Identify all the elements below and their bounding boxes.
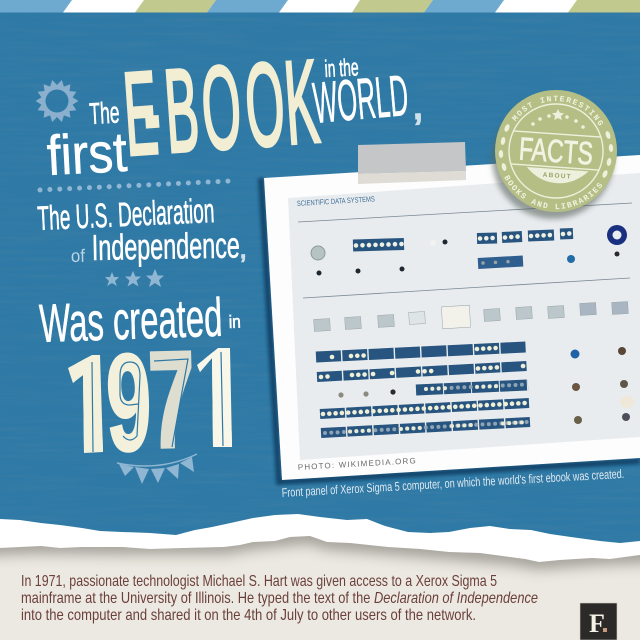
panel knobs <box>570 347 634 424</box>
badge arc text: BOOKS AND LIBRARIES <box>504 174 602 210</box>
digit inner lines <box>92 352 223 452</box>
badge banner: ABOUT: ABOUT <box>542 172 572 181</box>
body text: mainframe at the University of Illinois. He typed the text of the Declaration of Independence <box>21 590 538 607</box>
body text <box>21 573 538 624</box>
panel upper controls <box>298 203 632 298</box>
body text: In 1971, passionate technologist Michael S. Hart was given access to a Xerox Sigma 5 <box>21 573 497 590</box>
panel brand label: SCIENTIFIC DATA SYSTEMS <box>297 194 375 208</box>
title: The first E-BOOK in the world <box>45 36 425 187</box>
year: 1971: 9 <box>105 326 153 479</box>
body text: into the computer and shared it on the 4th of July to other users of the network. <box>21 607 476 624</box>
badge: facts about books and libraries <box>488 90 618 222</box>
text: The U.S. Declaration of Independence <box>37 192 247 268</box>
logo <box>580 603 617 640</box>
panel push buttons <box>314 302 628 331</box>
badge arc text: MOST INTERESTING <box>512 96 603 126</box>
year: 1971: 1 <box>192 322 236 475</box>
masking tape <box>358 142 466 184</box>
badge stars and dots <box>531 109 585 129</box>
text: was created in: Was created <box>38 288 223 354</box>
badge inner artwork <box>504 96 604 210</box>
year: 1971 <box>68 348 232 453</box>
title: The first E-BOOK in the world: , <box>410 79 425 129</box>
text: The U.S. Declaration of Independence: Independence <box>91 224 240 268</box>
torn paper strip <box>0 514 640 600</box>
panel indicator lamp rows <box>316 347 530 433</box>
year: 1971: 7 <box>147 323 197 476</box>
badge disc <box>495 90 617 212</box>
badge ring pills <box>499 123 613 179</box>
title: The first E-BOOK in the world: WORLD <box>310 63 411 136</box>
icon: three stars <box>105 269 164 287</box>
photo credit: PHOTO: WIKIMEDIA.ORG <box>298 456 416 472</box>
badge heading: FACTS: FACTS <box>518 130 594 172</box>
title: The first E-BOOK in the world: E-BOOK <box>120 36 323 181</box>
text: The U.S. Declaration of Independence: of <box>71 246 86 266</box>
badge shadow <box>492 97 614 219</box>
photo shadow <box>261 178 640 482</box>
title: The first E-BOOK in the world: in the <box>324 54 359 83</box>
photo frame <box>264 155 640 480</box>
year: 1971: 1 <box>63 328 107 481</box>
title: The first E-BOOK in the world: first <box>45 120 129 187</box>
icon: sun <box>36 80 78 122</box>
text: The U.S. Declaration of Independence: , <box>239 232 247 265</box>
paper footer panel <box>0 534 640 640</box>
text: The U.S. Declaration of Independence: The U.S. Declaration <box>37 192 215 238</box>
logo: F <box>589 609 605 638</box>
control panel surface <box>288 173 640 460</box>
badge arc text <box>504 96 603 210</box>
photo: Xerox Sigma 5 front panel <box>261 142 640 482</box>
top stripes <box>0 0 640 12</box>
dotted divider <box>40 181 230 190</box>
text: was created in <box>38 288 241 354</box>
text: was created in: in <box>228 312 241 332</box>
icon: bunting <box>117 454 197 484</box>
title: The first E-BOOK in the world: The <box>89 96 120 131</box>
